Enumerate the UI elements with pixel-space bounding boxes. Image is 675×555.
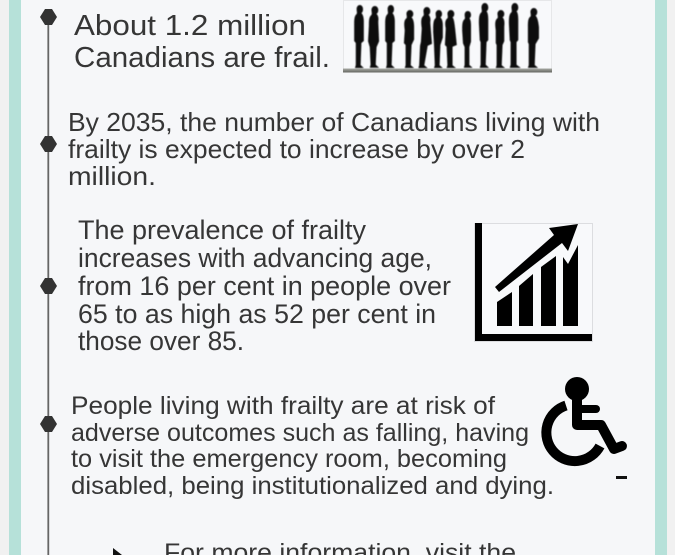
text block: prevalence by age: The prevalence of frailty — [78, 215, 367, 245]
text block: prevalence by age — [78, 215, 451, 356]
small dash mark — [616, 476, 627, 479]
icon: wheelchair user — [546, 377, 622, 461]
text block: 1.2 million Canadians: About 1.2 million — [74, 10, 306, 42]
text block: adverse outcomes: adverse outcomes such as falling, having — [71, 419, 529, 447]
text block: adverse outcomes: disabled, being institutionalized and dying. — [71, 472, 554, 500]
image: line of people silhouettes — [343, 0, 552, 72]
timeline with hexagon markers — [40, 9, 57, 555]
arrow bullet — [113, 548, 122, 555]
text block: 2035 projection: By 2035, the number of Canadians living with — [68, 107, 600, 137]
text block: prevalence by age: increases with advancing age, — [78, 243, 432, 273]
text block: adverse outcomes — [71, 392, 554, 500]
text block: prevalence by age: those over 85. — [78, 326, 244, 356]
text block: 1.2 million Canadians: Canadians are frail. — [74, 42, 330, 74]
text block: 2035 projection: frailty is expected to increase by over 2 — [68, 134, 525, 164]
text block: prevalence by age: 65 to as high as 52 per cent in — [78, 299, 436, 329]
text block: adverse outcomes: to visit the emergency room, becoming — [71, 445, 507, 473]
icon: rising bar chart with arrow — [474, 223, 592, 342]
text block: 2035 projection: million. — [68, 161, 156, 191]
text block: 2035 projection — [68, 107, 600, 191]
text block: adverse outcomes: People living with frailty are at risk of — [71, 392, 495, 420]
text block: prevalence by age: from 16 per cent in people over — [78, 271, 451, 301]
text block: 1.2 million Canadians — [74, 10, 330, 74]
